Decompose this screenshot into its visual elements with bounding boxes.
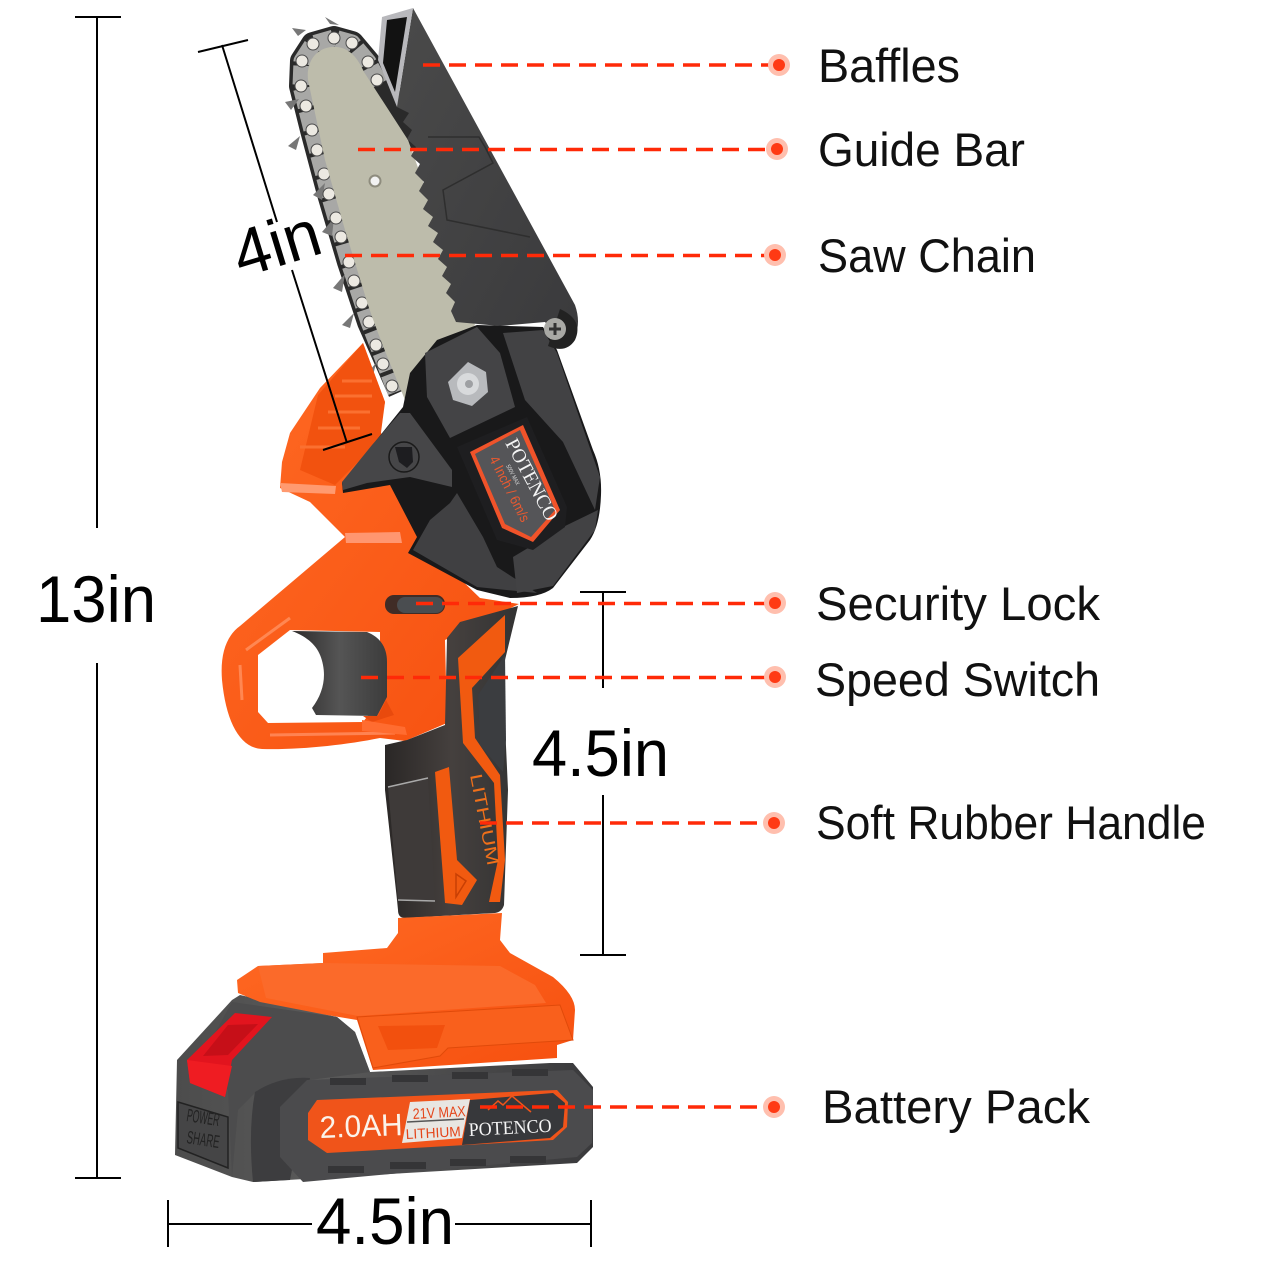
speed switch trigger [292,631,407,735]
security lock button [385,595,445,614]
battery label: POTENCO [468,1116,552,1141]
power share panel: SHARE [185,1127,221,1152]
brand plate: POTENCO [501,435,562,525]
battery mount adapter [237,913,575,1070]
callout: Guide Bar [358,123,1025,176]
callout: Saw Chain: Saw Chain [818,229,1036,282]
callout: Baffles: Baffles [818,39,960,92]
dimension: handle length 4.5in: 4.5in [532,716,669,790]
callout: Saw Chain [345,229,1036,282]
dimension: bar length 4in: 4in [223,195,329,291]
brand plate: 500V MAX [504,464,520,486]
guide bar [308,47,475,400]
dimension: bar length 4in [198,40,372,450]
callout: Guide Bar: Guide Bar [818,123,1025,176]
brand plate: 4 Inch / 6m/s [486,453,533,525]
callout: Security Lock [416,577,1100,630]
dimension: overall height 13in: 13in [36,562,156,636]
chainsaw product illustration [175,8,601,1182]
dimension: overall height 13in [36,17,156,1178]
power share panel [178,1102,228,1168]
battery label: 2.0AH [319,1107,403,1145]
battery label: 21V MAX [412,1103,466,1123]
baffle screw [544,309,577,349]
callout: Battery Pack: Battery Pack [822,1080,1090,1133]
motor housing [342,309,601,598]
callout: Speed Switch: Speed Switch [815,653,1100,706]
battery label [308,1090,568,1153]
battery pack [175,995,593,1182]
power share panel: POWER [185,1105,221,1130]
baffles [378,8,578,346]
battery frame [280,1070,593,1182]
trigger guard opening [258,630,380,723]
release latch [187,1013,272,1097]
callout: Soft Rubber Handle [480,796,1206,849]
orange body [222,343,519,749]
hex nut [448,362,488,406]
callout: Speed Switch [361,653,1100,706]
saw chain [285,17,415,392]
dimension: base width 4.5in [168,1184,591,1258]
callout: Soft Rubber Handle: Soft Rubber Handle [816,796,1206,849]
callout: Security Lock: Security Lock [816,577,1100,630]
callout: Baffles [423,39,960,92]
callout: Battery Pack [480,1080,1090,1133]
dimension: base width 4.5in: 4.5in [316,1184,454,1258]
brand plate [457,417,567,550]
battery label: LITHIUM [405,1123,461,1142]
dimension: handle length 4.5in [532,592,669,955]
grip lettering: LITHIUM [466,772,502,867]
soft rubber handle grip [385,606,518,918]
